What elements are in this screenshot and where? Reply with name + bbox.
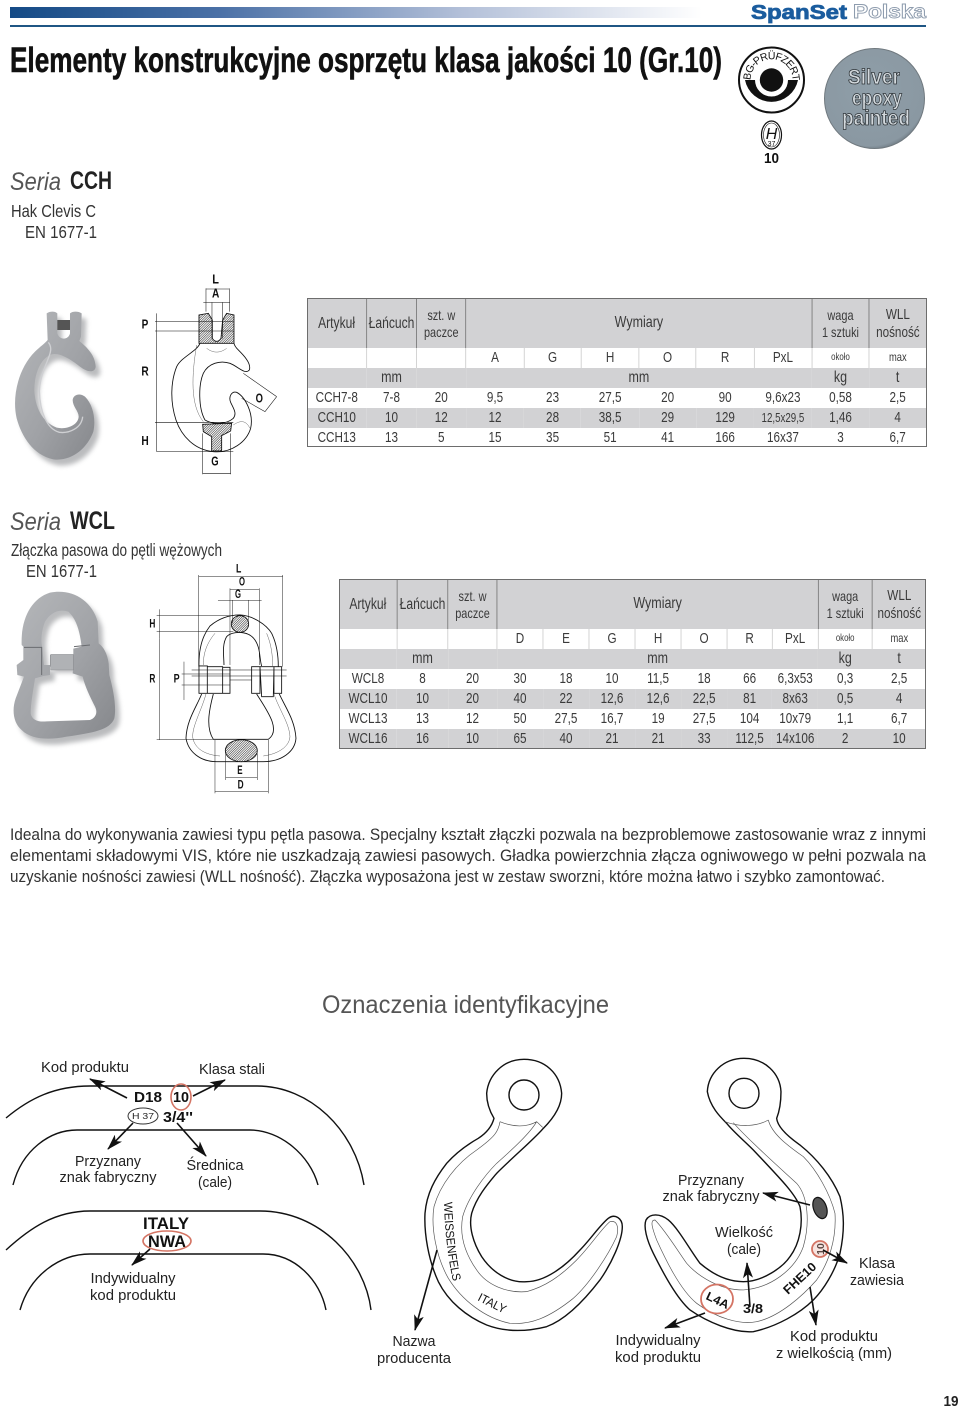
table: WCL specifications: 27,5 [692, 710, 715, 727]
diagram: left eye hook markings: producenta [377, 1351, 452, 1367]
diagram: top link section markings: 10 [173, 1089, 189, 1106]
diagram: right eye hook markings: znak fabryczny [662, 1189, 760, 1205]
table: WCL specifications: 40 [559, 730, 572, 747]
diagram: CCH hook dimensions [141, 272, 277, 474]
diagram: bottom link section markings [6, 1211, 371, 1310]
table: WCL specifications: 18 [559, 670, 572, 687]
table: CCH specifications: 5 [438, 429, 444, 446]
table: CCH specifications: CCH13 [317, 429, 355, 446]
table: WCL specifications: 16 [416, 730, 429, 747]
icon: H37 mark with class 10: H [766, 126, 778, 143]
table: CCH specifications: 0,58 [829, 389, 851, 406]
icon: silver epoxy painted badge: epoxy [852, 87, 902, 110]
icon: silver epoxy painted badge [824, 48, 924, 148]
photo: CCH hook [15, 312, 100, 466]
table: WCL specifications: waga [832, 588, 858, 604]
diagram: WCL connector dimensions: O [239, 576, 245, 589]
table: WCL specifications: 14x106 [775, 730, 814, 747]
table: WCL specifications: WCL10 [348, 690, 387, 707]
table: WCL specifications: WCL13 [348, 710, 387, 727]
text: CCH description: EN 1677-1 [25, 222, 97, 242]
diagram: bottom link section markings: Indywidualny [90, 1271, 176, 1287]
diagram: left eye hook markings: ITALY [476, 1290, 509, 1316]
table: WCL specifications: WCL16 [348, 730, 387, 747]
table: WCL specifications: WLL [887, 587, 911, 604]
table: WCL specifications: 13 [416, 710, 429, 727]
table: CCH specifications: Wymiary [614, 314, 663, 331]
diagram: right eye hook markings: (cale) [727, 1242, 761, 1258]
table: WCL specifications: 4 [895, 690, 902, 707]
table: CCH specifications: mm [628, 369, 649, 386]
logo: SpanSet Polska [751, 2, 927, 24]
table: WCL specifications: 33 [697, 730, 710, 747]
table: WCL specifications: 18 [697, 670, 710, 687]
table: CCH specifications: 12 [488, 409, 501, 426]
table: CCH specifications: 28 [546, 409, 559, 426]
diagram: right eye hook markings: Indywidualny [616, 1333, 701, 1349]
table: WCL specifications: PxL [785, 630, 805, 647]
header gradient bar [10, 7, 926, 27]
table: WCL specifications: mm [412, 650, 432, 667]
table: WCL specifications: 10x79 [779, 710, 811, 727]
table: CCH specifications: 7-8 [383, 389, 399, 406]
table: WCL specifications: około [835, 633, 854, 644]
table: CCH specifications: około [831, 352, 849, 363]
table: WCL specifications: Artykuł [349, 596, 386, 613]
diagram: right eye hook markings: zawiesia [850, 1273, 905, 1289]
table: CCH specifications: O [663, 349, 672, 366]
icon: BG-PRÜFZERT badge: BG-PRÜFZERT [743, 50, 800, 80]
table: WCL specifications: WCL8 [351, 670, 384, 687]
table: WCL specifications: 81 [743, 690, 756, 707]
table: WCL specifications: Wymiary [633, 595, 681, 612]
diagram: right eye hook markings: L4A [704, 1289, 732, 1312]
diagram: top link section markings: Przyznany [75, 1154, 142, 1170]
table: CCH specifications: 51 [603, 429, 616, 446]
diagram: CCH hook dimensions: L [212, 272, 219, 286]
table: WCL specifications: 12,6 [600, 690, 623, 707]
table: CCH specifications: 9,5 [486, 389, 503, 406]
text: CCH description: Hak Clevis C [11, 201, 96, 221]
diagram: top link section markings: Kod produktu [41, 1060, 129, 1076]
diagram: WCL connector dimensions: D [238, 779, 244, 792]
heading: Seria CCH [10, 167, 112, 196]
table: CCH specifications: 13 [384, 429, 398, 446]
table: CCH specifications: kg [833, 369, 847, 386]
table: CCH specifications: 15 [488, 429, 501, 446]
heading: Seria WCL: Seria [10, 508, 61, 536]
table: CCH specifications: G [548, 349, 557, 366]
table: CCH specifications: 38,5 [598, 409, 621, 426]
diagram: top link section markings: (cale) [198, 1175, 232, 1191]
diagram: WCL connector dimensions: P [174, 673, 180, 686]
diagram: bottom link section markings: NWA [148, 1232, 186, 1251]
diagram: right eye hook markings: kod produktu [615, 1350, 701, 1366]
table: WCL specifications: 0,5 [837, 690, 853, 707]
table: WCL specifications: 12 [466, 710, 479, 727]
diagram: top link section markings: H 37 [132, 1112, 155, 1121]
table: CCH specifications: 16x37 [767, 429, 798, 446]
diagram: right eye hook markings: 10 [815, 1243, 827, 1255]
icon: H37 mark with class 10 [762, 121, 782, 167]
diagram: left eye hook markings: WEISSENFELS [444, 1202, 461, 1280]
table: WCL specifications: 8x63 [782, 690, 807, 707]
title: Elementy konstrukcyjne osprzętu klasa jakości 10 (Gr.10) [10, 41, 722, 80]
text: WCL paragraph [10, 825, 927, 886]
heading: Seria WCL [10, 507, 115, 536]
table: WCL specifications: 8 [419, 670, 425, 687]
table: WCL specifications: mm [647, 650, 667, 667]
table: WCL specifications: 19 [651, 710, 664, 727]
diagram: top link section markings: znak fabryczny [60, 1170, 157, 1186]
table: WCL specifications: nośność [877, 604, 921, 622]
diagram: WCL connector dimensions [149, 562, 296, 793]
heading: Oznaczenia identyfikacyjne: Oznaczenia identyfikacyjne [322, 991, 609, 1019]
diagram: WCL connector dimensions: E [237, 764, 243, 777]
table: WCL specifications: 65 [513, 730, 526, 747]
icon: silver epoxy painted badge: painted [842, 107, 910, 130]
table: CCH specifications: mm [381, 369, 401, 386]
diagram: top link section markings [6, 1060, 364, 1191]
diagram: top link section markings: D18 [134, 1089, 162, 1106]
text: WCL description: Złączka pasowa do pętli wężowych [11, 540, 222, 560]
table: CCH specifications: Artykuł [318, 315, 355, 332]
table: CCH specifications: A [491, 349, 498, 366]
diagram: right eye hook markings: Kod produktu [790, 1329, 878, 1345]
table: CCH specifications: 6,7 [889, 429, 905, 446]
table: WCL specifications: 30 [513, 670, 526, 687]
table: CCH specifications: 35 [546, 429, 559, 446]
table: WCL specifications: R [745, 630, 753, 647]
table: WCL specifications: 20 [466, 690, 479, 707]
table: WCL specifications: 10 [892, 730, 905, 747]
table: WCL specifications: 22,5 [692, 690, 715, 707]
table: WCL specifications: 1,1 [837, 710, 853, 727]
table: WCL specifications: 112,5 [735, 730, 763, 747]
table: CCH specifications: 9,6x23 [765, 389, 800, 406]
heading: Seria CCH: Seria [10, 168, 61, 196]
table: WCL specifications: 12,6 [646, 690, 669, 707]
table: WCL specifications: 10 [605, 670, 618, 687]
table: WCL specifications: paczce [455, 604, 489, 620]
table: CCH specifications: 20 [661, 389, 674, 406]
icon: silver epoxy painted badge: Silver [848, 66, 900, 89]
logo: SpanSet Polska: Polska [853, 2, 927, 23]
table: WCL specifications: 21 [651, 730, 664, 747]
table: WCL specifications: 1 sztuki [826, 604, 863, 620]
diagram: CCH hook dimensions: P [142, 317, 149, 331]
table: WCL specifications: 22 [559, 690, 572, 707]
text: CCH description [11, 201, 97, 242]
diagram: right eye hook markings [615, 1058, 905, 1366]
diagram: bottom link section markings: kod produktu [90, 1288, 176, 1304]
table: WCL specifications: 20 [466, 670, 479, 687]
table: CCH specifications: 2,5 [889, 389, 905, 406]
table: CCH specifications: 1,46 [829, 409, 851, 426]
table: CCH specifications: 3 [837, 429, 843, 446]
table: CCH specifications: 129 [715, 409, 734, 426]
diagram: right eye hook markings: Przyznany [678, 1173, 745, 1189]
table: WCL specifications: 6,3x53 [777, 670, 812, 687]
table: WCL specifications: max [890, 631, 908, 645]
table: CCH specifications: 10 [384, 409, 398, 426]
diagram: WCL connector dimensions: R [149, 673, 156, 686]
table: CCH specifications: 90 [718, 389, 731, 406]
diagram: CCH hook dimensions: O [256, 391, 263, 405]
diagram: right eye hook markings: 3/8 [743, 1301, 763, 1316]
table: CCH specifications [307, 298, 927, 447]
diagram: top link section markings: Średnica [186, 1156, 244, 1174]
diagram: top link section markings: Klasa stali [199, 1062, 265, 1078]
icon: H37 mark with class 10: 10 [764, 150, 779, 167]
diagram: WCL connector dimensions: L [236, 562, 241, 575]
icon: H37 mark with class 10: 37 [768, 141, 775, 148]
table: WCL specifications: 2 [841, 730, 848, 747]
heading: Seria WCL: WCL [70, 507, 115, 535]
diagram: left eye hook markings: Nazwa [392, 1334, 436, 1350]
table: WCL specifications: szt. w [458, 588, 486, 604]
table: WCL specifications: 40 [513, 690, 526, 707]
table: CCH specifications: 4 [894, 409, 900, 426]
table: WCL specifications: t [897, 650, 900, 667]
table: WCL specifications: 11,5 [647, 670, 669, 687]
table: CCH specifications: 20 [434, 389, 447, 406]
table: WCL specifications: 0,3 [837, 670, 853, 687]
table: WCL specifications: 27,5 [554, 710, 577, 727]
diagram: CCH hook dimensions: A [212, 287, 219, 301]
table: CCH specifications: 12,5x29,5 [761, 411, 804, 425]
logo: SpanSet Polska: SpanSet [751, 2, 847, 24]
table: CCH specifications: WLL [885, 306, 909, 323]
text: WCL description [11, 540, 222, 581]
table: WCL specifications: 6,7 [890, 710, 907, 727]
table: WCL specifications: G [607, 630, 616, 647]
photo: WCL connector [14, 592, 120, 745]
table: WCL specifications: Łańcuch [399, 596, 445, 613]
table: WCL specifications [339, 579, 926, 749]
diagram: right eye hook markings: Wielkość [715, 1225, 773, 1241]
table: CCH specifications: nośność [876, 324, 919, 340]
table: CCH specifications: CCH10 [317, 409, 355, 426]
table: CCH specifications: R [720, 349, 729, 366]
table: CCH specifications: 41 [661, 429, 674, 446]
diagram: CCH hook dimensions: G [211, 455, 219, 469]
table: CCH specifications: 27,5 [598, 389, 621, 406]
table: CCH specifications: 1 sztuki [821, 324, 858, 340]
table: WCL specifications: 2,5 [890, 670, 907, 687]
table: WCL specifications: 104 [739, 710, 759, 727]
heading: Seria CCH: CCH [70, 167, 112, 195]
table: WCL specifications: 21 [605, 730, 618, 747]
diagram: WCL connector dimensions: G [235, 588, 241, 601]
diagram: WCL connector dimensions: H [149, 618, 155, 631]
table: CCH specifications: t [895, 369, 899, 386]
table: WCL specifications: 10 [466, 730, 479, 747]
diagram: right eye hook markings: z wielkością (mm) [776, 1346, 892, 1362]
table: CCH specifications: paczce [423, 324, 458, 340]
diagram: CCH hook dimensions: R [141, 365, 149, 379]
diagram: top link section markings: 3/4'' [163, 1109, 193, 1126]
table: WCL specifications: 10 [416, 690, 429, 707]
table: WCL specifications: 66 [743, 670, 756, 687]
table: WCL specifications: O [699, 630, 708, 647]
icon: BG-PRÜFZERT badge [738, 46, 805, 114]
table: CCH specifications: 12 [434, 409, 447, 426]
diagram: bottom link section markings: ITALY [143, 1214, 190, 1233]
table: WCL specifications: kg [838, 650, 851, 667]
table: CCH specifications: 29 [661, 409, 674, 426]
diagram: left eye hook markings [377, 1058, 623, 1367]
diagram: CCH hook dimensions: H [141, 434, 149, 448]
diagram: right eye hook markings: Klasa [859, 1256, 896, 1272]
table: CCH specifications: 166 [715, 429, 734, 446]
diagram: right eye hook markings: FHE10 [780, 1260, 819, 1297]
table: WCL specifications: 16,7 [600, 710, 623, 727]
table: WCL specifications: H [653, 630, 662, 647]
table: CCH specifications: max [889, 350, 906, 364]
table: WCL specifications: 50 [513, 710, 526, 727]
table: CCH specifications: 23 [546, 389, 559, 406]
table: WCL specifications: E [562, 630, 569, 647]
text: WCL description: EN 1677-1 [26, 561, 97, 581]
table: CCH specifications: szt. w [427, 307, 455, 323]
table: WCL specifications: D [515, 630, 524, 647]
table: CCH specifications: CCH7-8 [315, 389, 357, 406]
table: CCH specifications: Łańcuch [368, 315, 414, 332]
table: CCH specifications: PxL [772, 349, 793, 366]
table: CCH specifications: H [605, 349, 614, 366]
table: CCH specifications: waga [827, 307, 853, 323]
